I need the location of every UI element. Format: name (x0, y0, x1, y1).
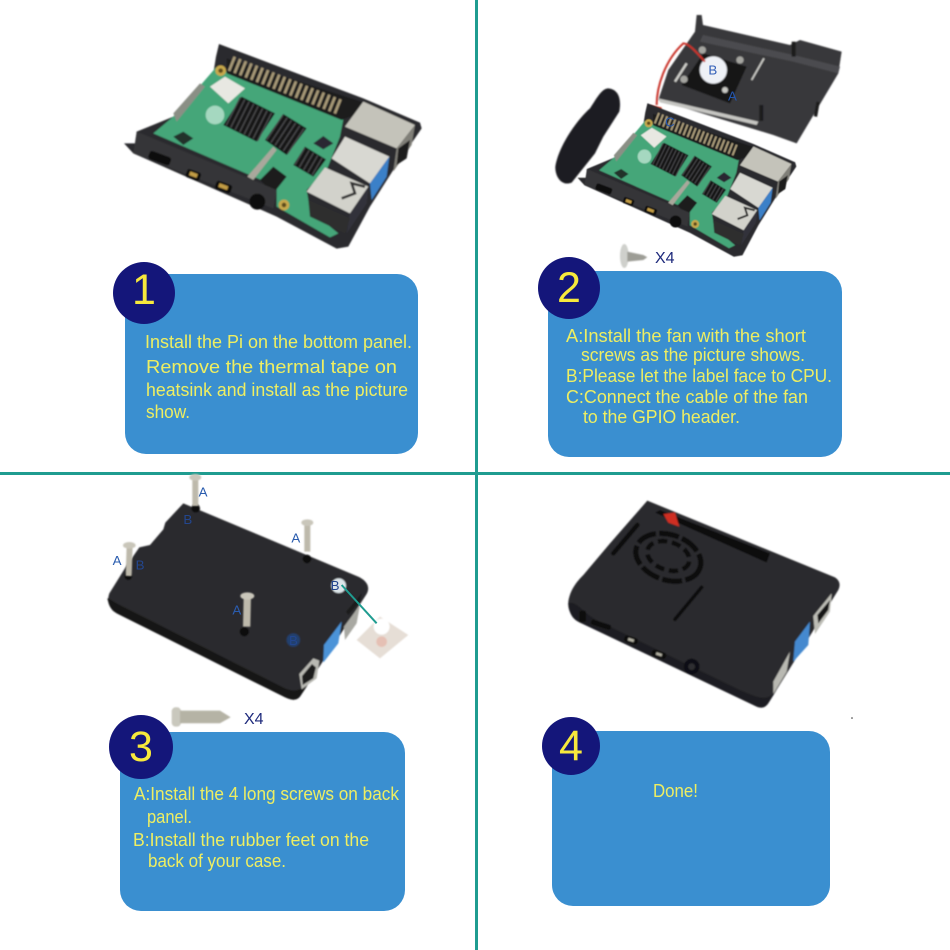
step 3 text: A:Install the 4 long screws on back (134, 784, 400, 804)
step 1 text: Remove the thermal tape on (146, 357, 397, 377)
speck (851, 717, 853, 719)
photo: fan installation exploded view (555, 15, 842, 184)
badge 1: 1 (132, 266, 156, 314)
A and B markers: A (232, 603, 241, 618)
photo: finished case (568, 501, 840, 708)
fan labels A B C: A (728, 89, 737, 104)
step 2 text: B:Please let the label face to CPU. (566, 366, 832, 386)
step 2 text (566, 326, 832, 427)
A and B markers: A (199, 485, 208, 500)
badge 3: 3 (129, 723, 153, 771)
label: X4 long screws: X4 (244, 711, 264, 728)
box (125, 274, 418, 454)
icon: long screw (172, 707, 231, 727)
step 3 text: B:Install the rubber feet on the (133, 830, 369, 850)
step 3 text: panel. (147, 807, 192, 827)
badge 3 (109, 715, 173, 779)
step 1 text (145, 332, 412, 422)
A and B markers (113, 485, 340, 648)
step 2 text: C:Connect the cable of the fan (566, 387, 808, 407)
badge 4: 4 (559, 722, 583, 770)
panel: step 2 (538, 257, 842, 457)
step 2 text: screws as the picture shows. (581, 345, 805, 365)
badge 2 (538, 257, 600, 319)
step 2 text: to the GPIO header. (583, 407, 740, 427)
step 1 text: Install the Pi on the bottom panel. (145, 332, 412, 352)
box (120, 732, 405, 911)
A and B markers: A (113, 553, 122, 568)
badge 1 (113, 262, 175, 324)
step 3 text: back of your case. (148, 851, 286, 871)
photo: Raspberry Pi on bottom panel (124, 44, 422, 249)
step 4 text: Done! (653, 781, 698, 801)
fan labels A B C: B (708, 63, 717, 78)
photo: Pi below the fan lid (578, 103, 796, 257)
panel: step 3 (109, 715, 405, 911)
A and B markers: B (183, 512, 192, 527)
A and B markers: B (289, 633, 298, 648)
label: X4 short screws: X4 (655, 250, 675, 267)
A and B markers: B (331, 578, 340, 593)
step 2 text: A:Install the fan with the short (566, 326, 806, 346)
box (552, 731, 830, 906)
icon: short screw (620, 244, 647, 268)
case lid with fan (650, 15, 842, 143)
fan labels A B C (665, 63, 737, 130)
fan labels A B C: C (665, 115, 675, 130)
box (548, 271, 842, 457)
step 3 text (133, 784, 400, 871)
step 1 text: heatsink and install as the picture (146, 380, 408, 400)
case body (107, 503, 408, 700)
side panel (555, 88, 620, 184)
A and B markers: A (291, 531, 300, 546)
badge 4 (542, 717, 600, 775)
pointer line to rubber foot (342, 585, 377, 623)
step 1 text: show. (146, 402, 190, 422)
badge 2: 2 (557, 264, 581, 312)
A and B markers: B (136, 557, 145, 572)
long screws (123, 474, 313, 627)
panel: step 1 (113, 262, 418, 454)
panel: step 4 (542, 717, 830, 906)
photo: closed case back with long screws (107, 474, 408, 700)
